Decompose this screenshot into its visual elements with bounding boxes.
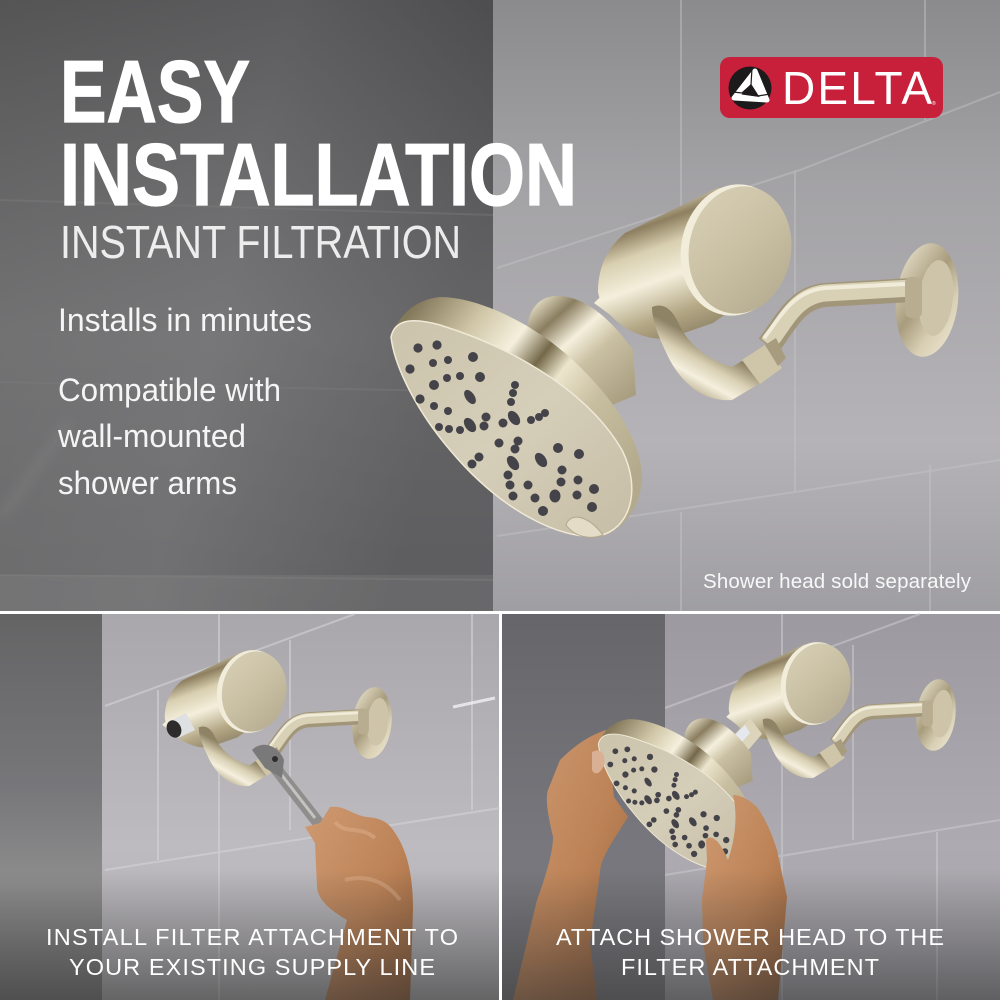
text block: benefits: wall-mounted — [57, 418, 246, 454]
right tile wall — [0, 0, 1000, 611]
step 1 caption: INSTALL FILTER ATTACHMENT TO — [46, 924, 458, 950]
step 2 filter and arm — [726, 637, 959, 778]
step 2 right hand — [702, 795, 787, 1000]
text block: benefits: Compatible with — [58, 372, 281, 408]
step 2 wall — [502, 614, 1000, 1000]
left dark overlay panel — [0, 0, 493, 611]
step 2 connector — [722, 718, 762, 762]
step 2 fingertip — [592, 751, 604, 773]
step 1 caption — [46, 924, 458, 980]
text block: benefits — [57, 302, 312, 501]
step 1 hand — [305, 807, 413, 1000]
step 1 filter and arm — [162, 645, 395, 786]
heading: installation: INSTALLATION — [60, 125, 577, 224]
logo: Delta — [720, 57, 943, 118]
step 1 dark strip — [0, 614, 102, 1000]
step 1 wrench — [252, 745, 320, 825]
step 2 left hand — [513, 730, 628, 1000]
text block: benefits: shower arms — [58, 465, 237, 501]
panel: top hero scene — [0, 0, 1000, 611]
step 2 dark strip — [502, 614, 665, 1000]
step 1 threaded outlet — [164, 713, 195, 740]
step 2 caption — [556, 924, 944, 980]
logo: Delta: ® — [932, 100, 936, 107]
subheading: INSTANT FILTRATION — [60, 216, 461, 268]
step 1 caption: YOUR EXISTING SUPPLY LINE — [69, 954, 435, 980]
step 1 wall — [0, 614, 499, 1000]
text block: benefits: Installs in minutes — [58, 302, 312, 338]
step 2 shower head — [598, 718, 756, 871]
note: sold separately: Shower head sold separately — [703, 570, 972, 593]
heading: easy: EASY — [60, 42, 250, 141]
step 2 caption: FILTER ATTACHMENT — [621, 954, 879, 980]
panel: step 1 install filter — [0, 614, 500, 1000]
step 2 caption: ATTACH SHOWER HEAD TO THE — [556, 924, 944, 950]
panel: step 2 attach shower head — [502, 614, 1000, 1000]
title — [60, 42, 577, 268]
logo: Delta: DELTA — [782, 62, 932, 114]
product: shower head — [391, 296, 642, 537]
step 1 shade — [0, 870, 499, 1000]
product: filter and shower arm — [594, 176, 964, 400]
step 2 shade — [502, 870, 1000, 1000]
